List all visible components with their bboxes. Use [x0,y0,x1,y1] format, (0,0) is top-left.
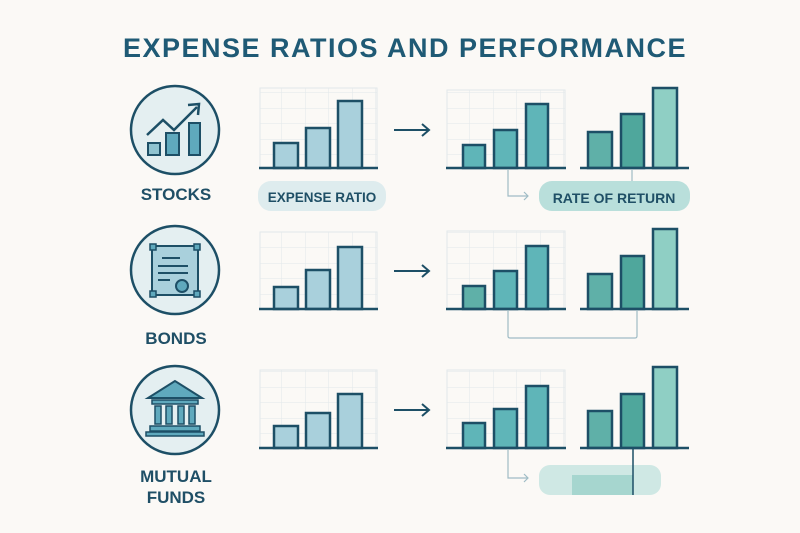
icon: stocks [131,86,219,174]
pill: expense ratio [258,181,386,211]
bracket connector [508,310,637,338]
chart: after fees stocks [446,90,566,168]
chart: after fees mutual funds [446,370,566,448]
pill: expense ratio: EXPENSE RATIO [268,190,376,205]
label: mutual funds: FUNDS [147,488,205,507]
label: bonds: BONDS [145,329,207,348]
label: stocks: STOCKS [141,185,211,204]
chart: expense ratio stocks [259,88,378,168]
row: bonds [131,226,689,348]
arrow [394,265,429,277]
pill: rate of return: RATE OF RETURN [553,190,675,206]
chart: expense ratio mutual funds [259,370,378,448]
row: mutual funds [131,366,689,507]
arrow [394,404,429,416]
icon: bonds [131,226,219,314]
row: stocks [131,86,690,211]
chart: return stocks [580,88,689,168]
title: EXPENSE RATIOS AND PERFORMANCE [123,33,687,63]
label: mutual funds: MUTUAL [140,467,212,486]
connector [508,169,632,200]
chart: expense ratio bonds [259,232,378,309]
icon: mutual funds [131,366,219,454]
chart: return mutual funds [580,367,689,448]
pill: blank return [539,449,661,495]
pill: rate of return [539,181,690,211]
chart: return bonds [580,229,689,309]
chart: after fees bonds [446,231,566,309]
arrow [394,124,429,136]
connector [508,449,528,482]
